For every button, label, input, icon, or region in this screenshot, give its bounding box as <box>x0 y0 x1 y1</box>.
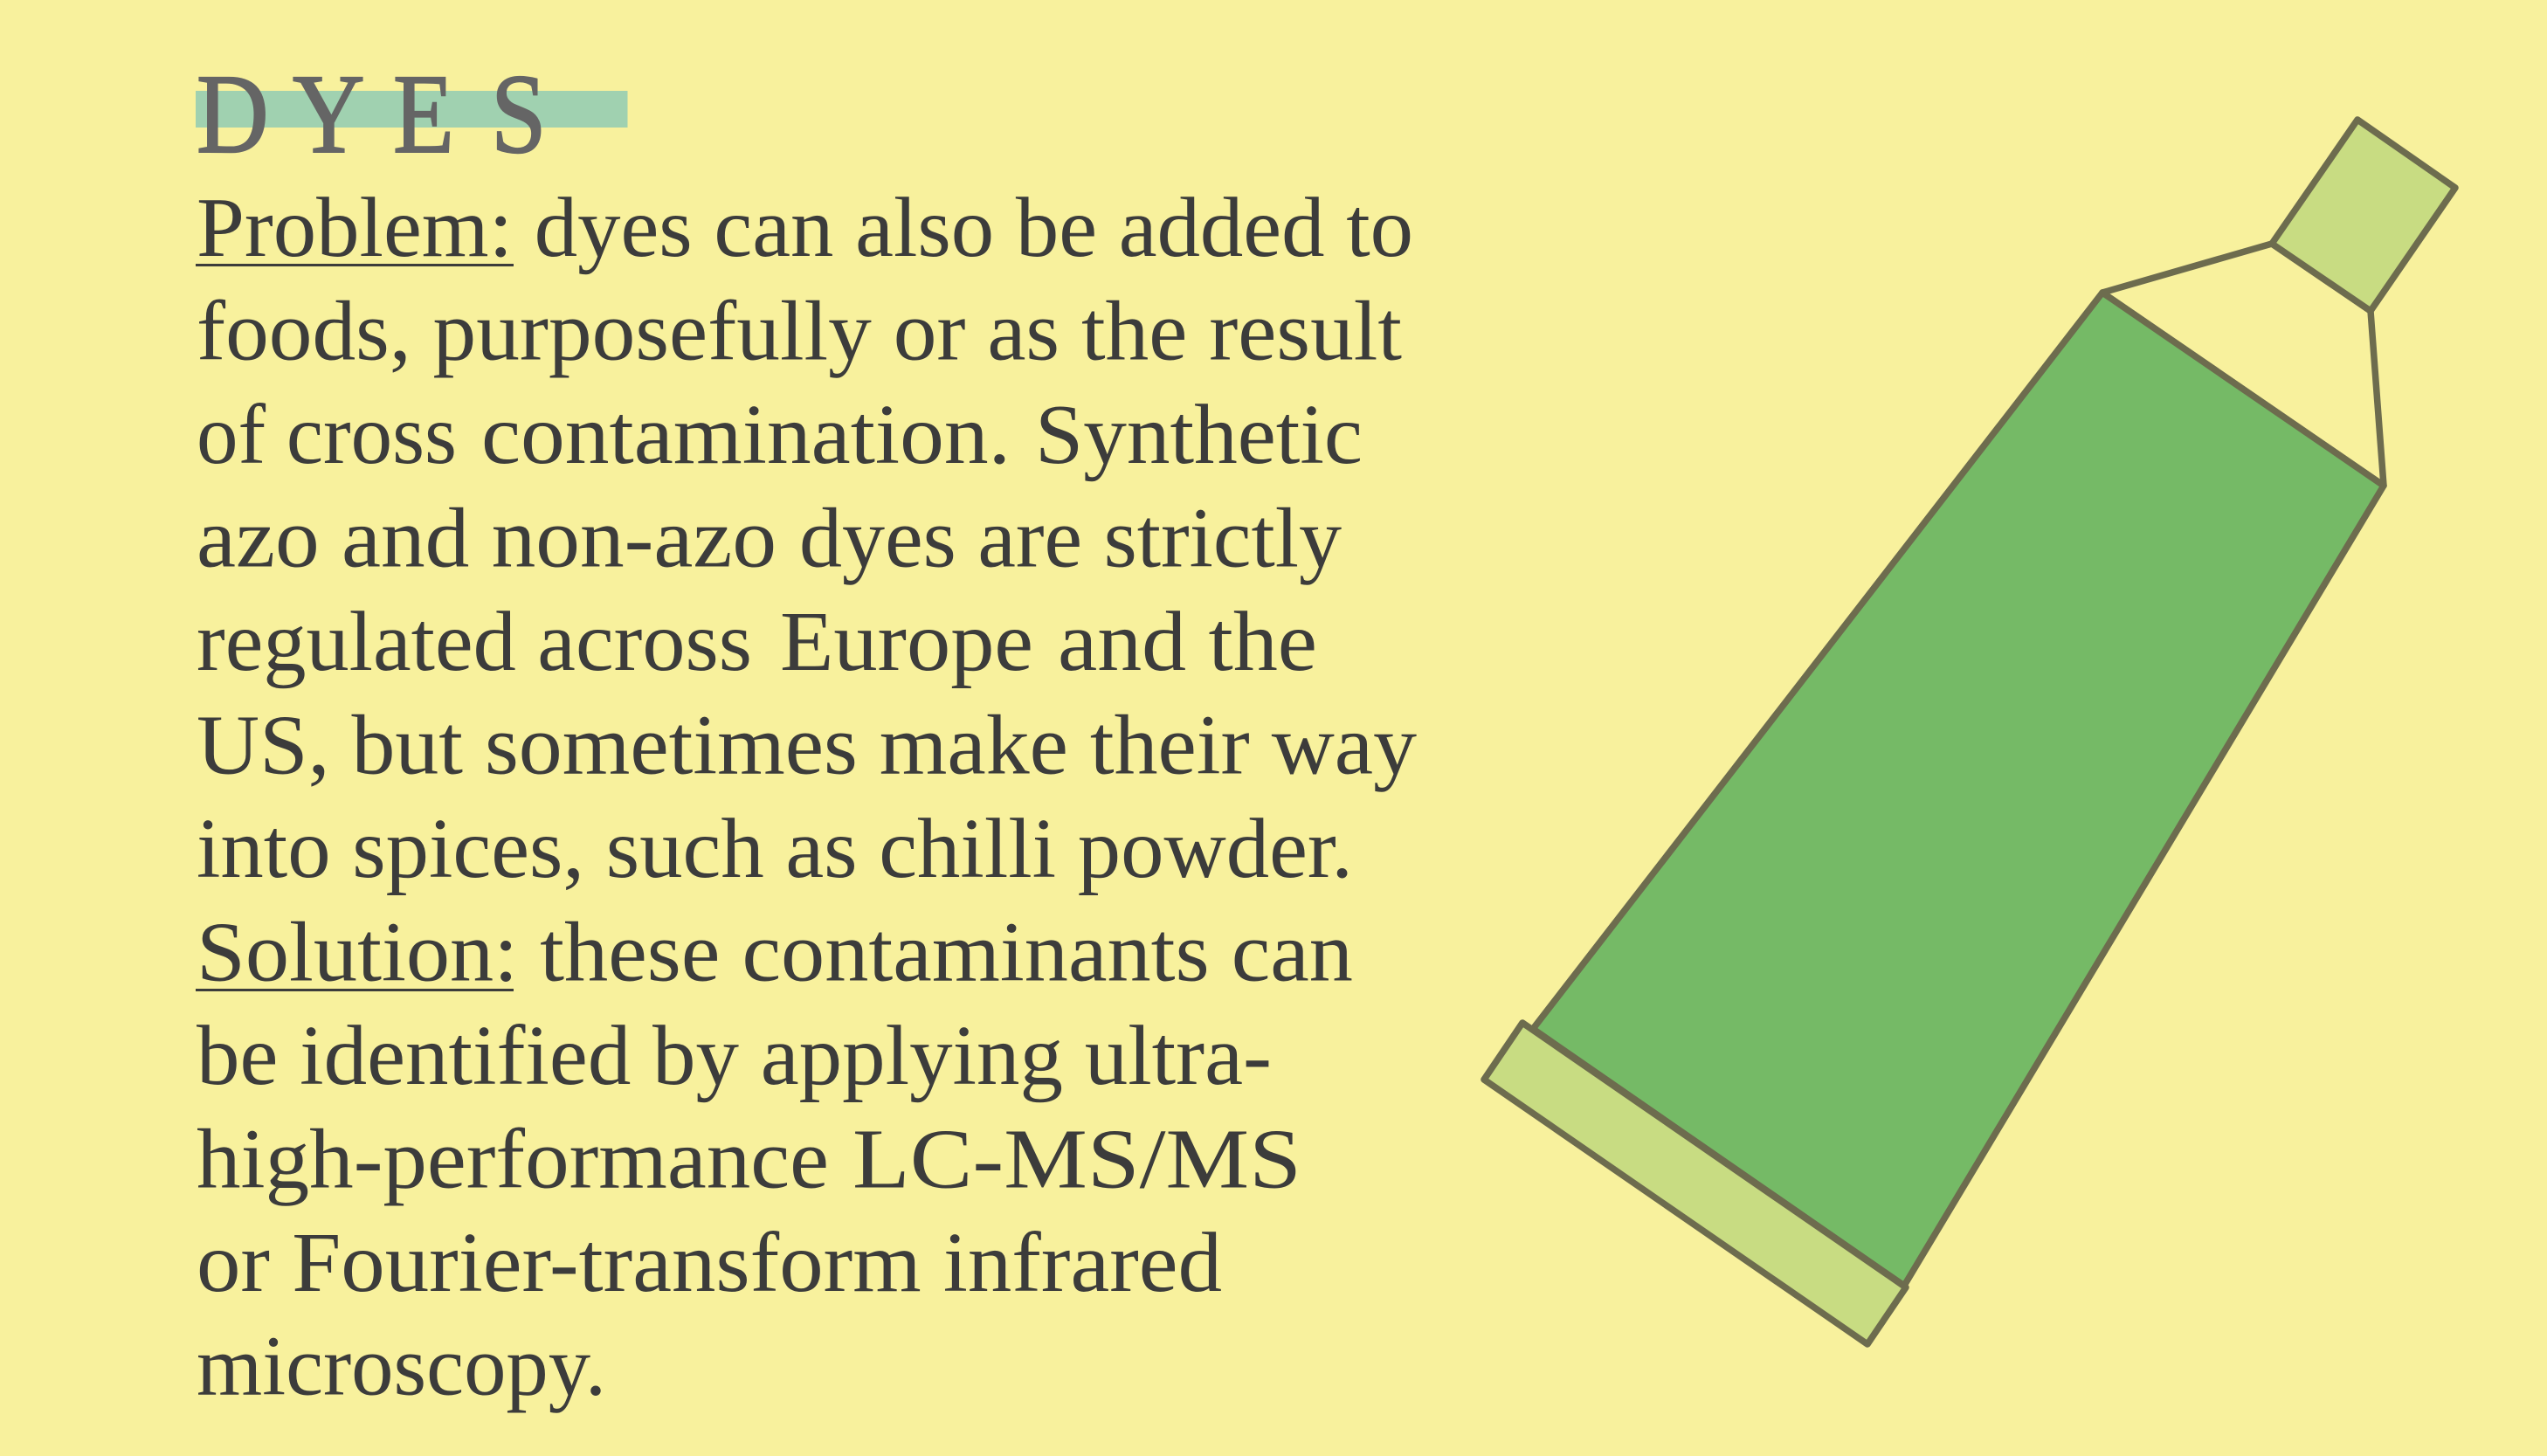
tube body <box>1533 293 2384 1286</box>
heading highlight bar <box>196 91 627 128</box>
problem paragraph: and the <box>1058 595 1317 689</box>
heading text: Y <box>293 52 365 177</box>
heading text <box>197 52 547 177</box>
problem paragraph <box>196 181 1417 896</box>
solution paragraph: LC-MS/MS <box>852 1113 1301 1207</box>
icon: green paint tube <box>1484 120 2455 1344</box>
solution paragraph: Solution: these contaminants can <box>197 905 1353 999</box>
problem paragraph: of cross <box>197 388 457 482</box>
problem paragraph: Europe <box>780 595 1033 689</box>
problem paragraph: dyes are strictly <box>799 491 1342 585</box>
solution paragraph: or Fourier-transform infrared <box>197 1216 1222 1310</box>
problem paragraph: contamination. <box>481 388 1011 482</box>
solution paragraph: high-performance <box>197 1113 829 1207</box>
solution paragraph: microscopy. <box>197 1319 606 1413</box>
problem paragraph: regulated across <box>197 595 752 689</box>
heading text: D <box>197 52 269 177</box>
heading text: E <box>393 52 454 177</box>
problem paragraph: into spices, such as chilli powder. <box>197 802 1353 896</box>
heading text: S <box>491 52 547 177</box>
solution paragraph: be identified by applying ultra- <box>197 1009 1272 1103</box>
tube cap <box>2272 120 2455 311</box>
heading: DYES with teal highlight <box>196 52 627 177</box>
problem paragraph: Problem: dyes can also be added to <box>197 181 1413 275</box>
tube crimped end <box>1484 1023 1906 1344</box>
problem paragraph: US, but sometimes make their way <box>197 699 1417 793</box>
body text: problem and solution <box>196 181 1417 1413</box>
solution paragraph <box>196 905 1353 1413</box>
problem paragraph: azo and non-azo <box>197 491 777 585</box>
tube shoulder <box>2102 244 2384 486</box>
problem paragraph: foods, purposefully or as the result <box>197 285 1402 379</box>
problem paragraph: Synthetic <box>1035 388 1363 482</box>
